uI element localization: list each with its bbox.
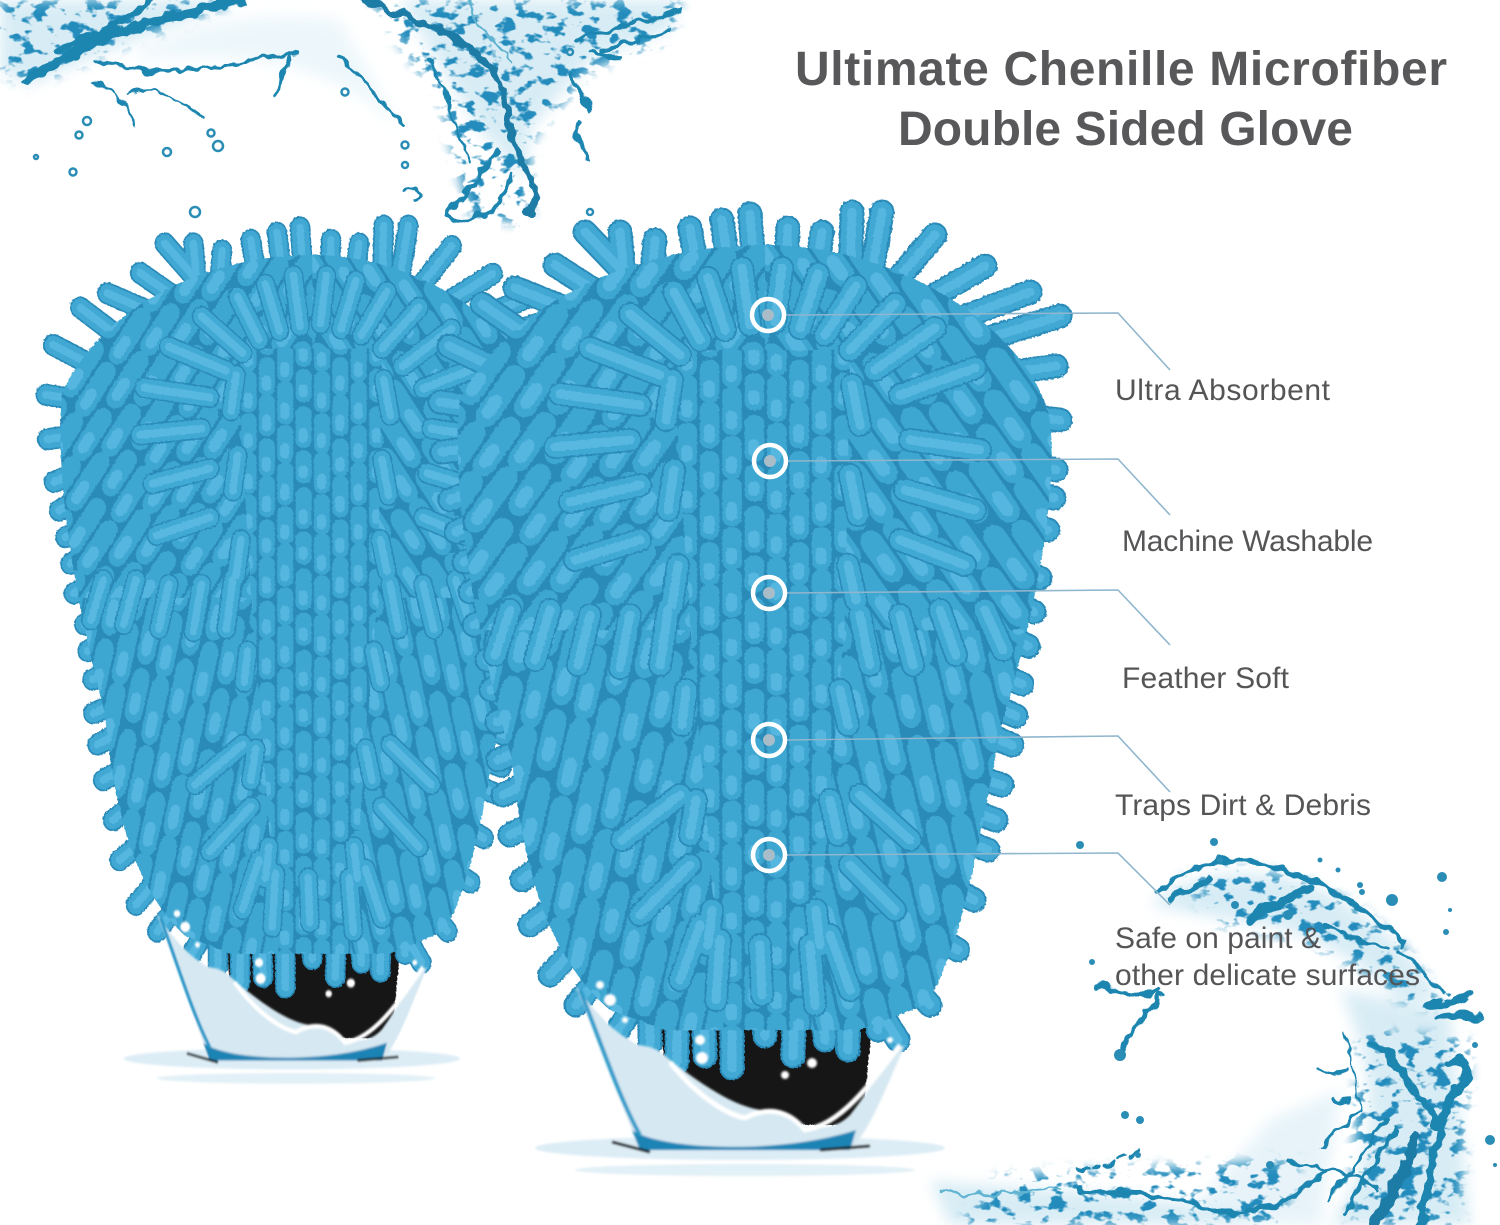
front glove <box>420 200 1085 1176</box>
callout: Feather Soft: Feather Soft <box>1122 662 1290 695</box>
callout: Feather Soft <box>753 577 1290 695</box>
callout: Safe on paint & other delicate surfaces: other delicate surfaces <box>1115 959 1420 992</box>
callout: Ultra Absorbent: Ultra Absorbent <box>1115 374 1331 407</box>
back glove <box>29 215 575 1084</box>
title <box>795 43 1447 156</box>
callout: Machine Washable <box>754 445 1373 558</box>
callout: Ultra Absorbent <box>752 299 1331 407</box>
callout: Traps Dirt & Debris: Traps Dirt & Debris <box>1115 789 1371 822</box>
title: Double Sided Glove <box>898 103 1353 156</box>
water splash: bottom right <box>930 838 1497 1225</box>
water splash: top left <box>0 0 680 225</box>
callout: Safe on paint & other delicate surfaces <box>753 839 1420 992</box>
callout: Traps Dirt & Debris <box>753 724 1371 822</box>
callout: Safe on paint & other delicate surfaces: Safe on paint & <box>1115 922 1321 955</box>
title: Ultimate Chenille Microfiber <box>795 43 1447 96</box>
callout: Machine Washable: Machine Washable <box>1122 525 1373 558</box>
